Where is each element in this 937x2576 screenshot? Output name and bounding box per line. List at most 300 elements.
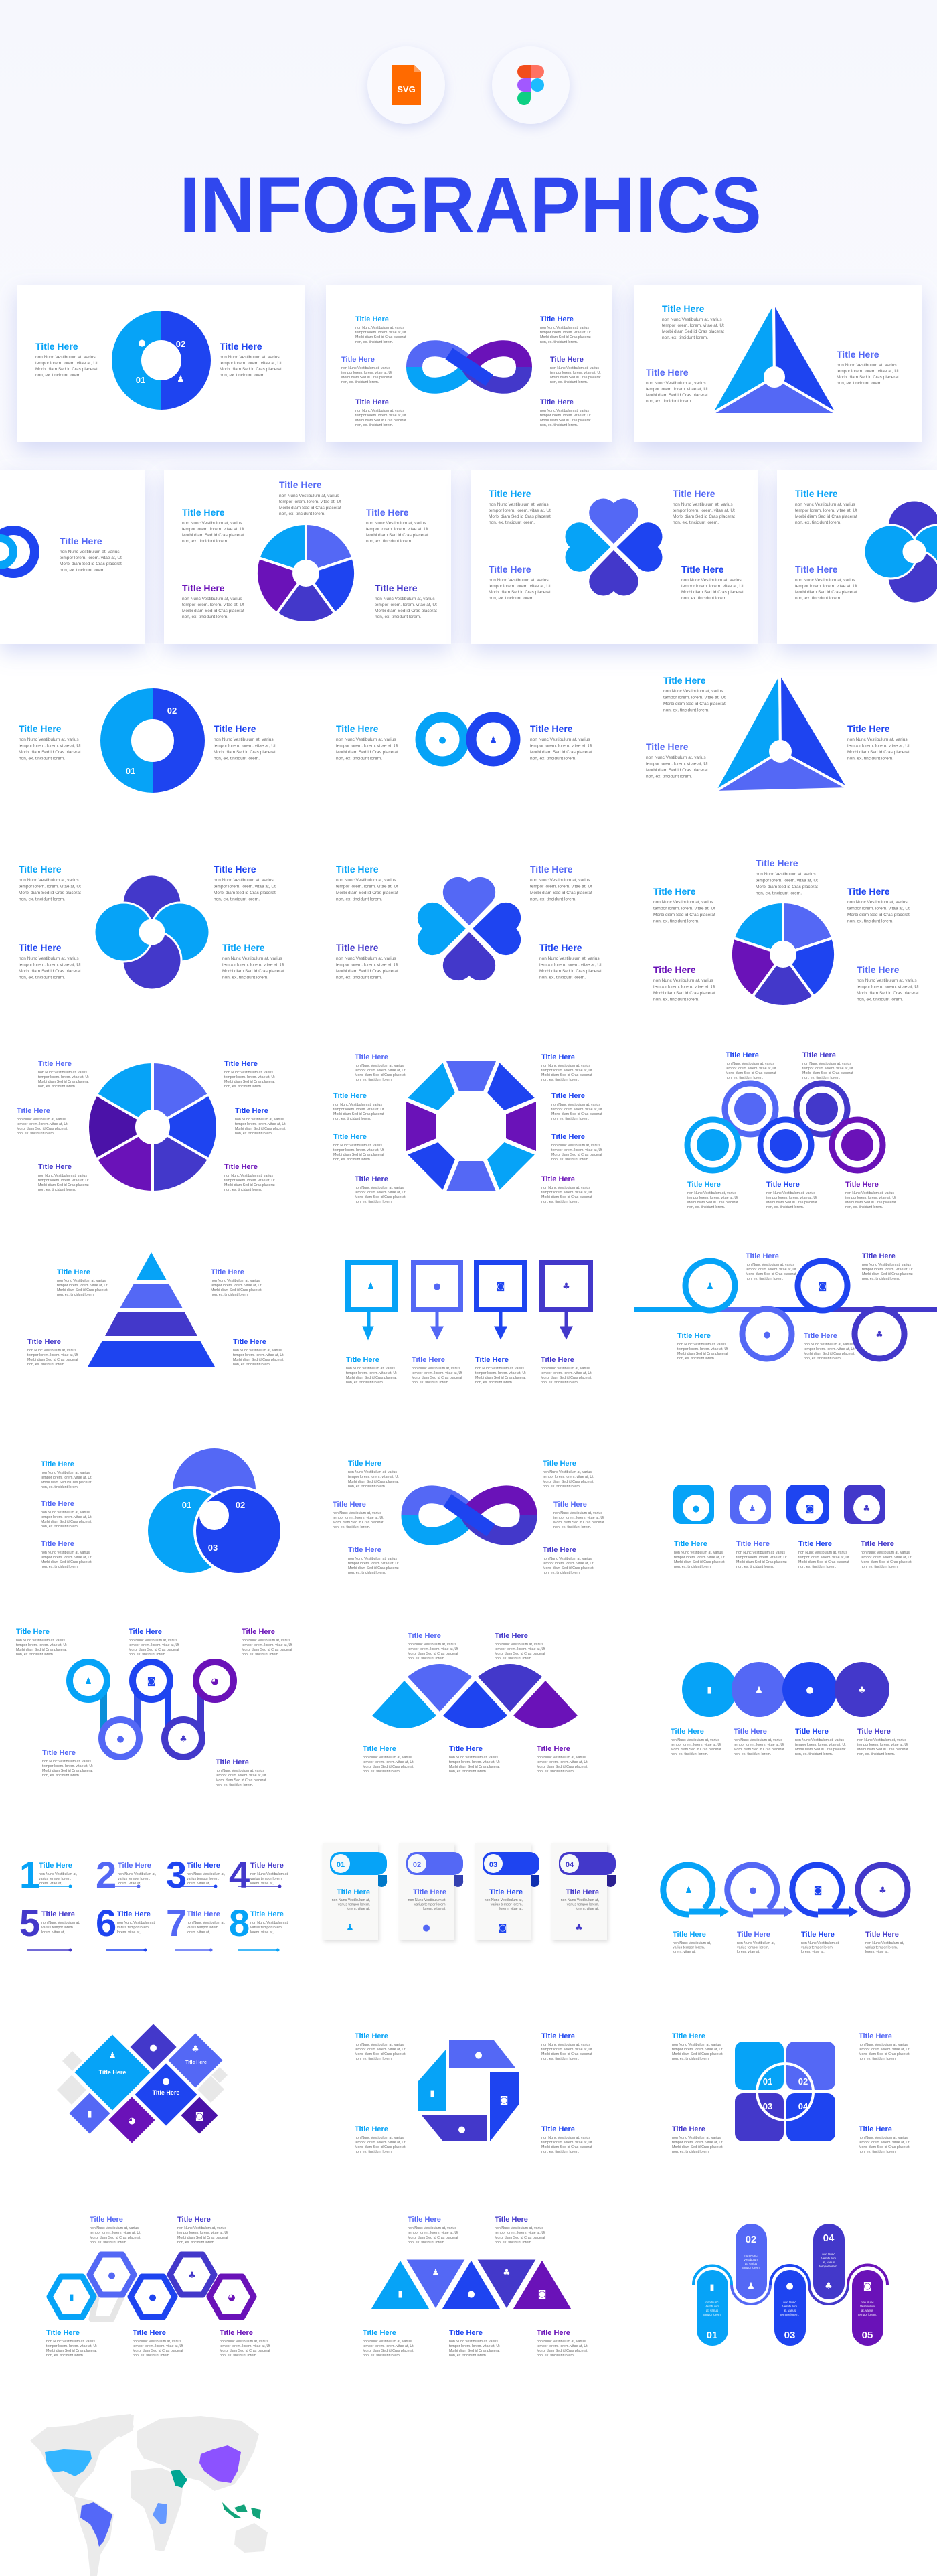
panel: swirl row4: Morbi diam Sed id Cras placerat bbox=[222, 969, 284, 974]
panel: six swirl row5: Title Here bbox=[38, 1060, 72, 1068]
panel: pills 01-05: tempor lorem. bbox=[819, 2265, 838, 2268]
panel: card pentagon: tempor lorem. lorem. vitae at, Ut bbox=[182, 527, 244, 532]
panel: numbered list 1-8: Title Here bbox=[117, 1910, 151, 1918]
panel: four-piece octagon: tempor lorem. lorem. vitae at, Ut bbox=[355, 2048, 406, 2052]
panel: boxes with arrows: tempor lorem. lorem. vitae at, Ut bbox=[475, 1371, 526, 1375]
panel: fans: Morbi diam Sed id Cras placerat bbox=[363, 1765, 414, 1769]
panel: snake rings: Title Here bbox=[242, 1628, 275, 1636]
panel: venn: Title Here bbox=[41, 1460, 74, 1468]
panel: four-piece octagon: non Nunc Vestibulum at, varius bbox=[541, 2136, 590, 2140]
text: right: tempor lorem. lorem. vitae at, Ut bbox=[220, 361, 282, 366]
panel: six swirl row5: Title Here bbox=[224, 1163, 258, 1171]
panel: card pentagon: tempor lorem. lorem. vitae at, Ut bbox=[366, 527, 428, 532]
chart: donut two halves: ♟ bbox=[177, 374, 185, 384]
panel: triangle row3: non, ex. tincidunt lorem. bbox=[663, 708, 709, 712]
panel: numbered list 1-8: lorem. vitae at, bbox=[250, 1882, 274, 1886]
panel: donut row3 bbox=[19, 704, 276, 777]
panel: two rings: non Nunc Vestibulum at, varius bbox=[530, 737, 590, 742]
panel: octagon row5: non Nunc Vestibulum at, varius bbox=[355, 1186, 404, 1190]
panel: triangles: Title Here bbox=[449, 2329, 483, 2337]
panel: triangle row3: Morbi diam Sed id Cras placerat bbox=[847, 750, 910, 755]
panel: pyramid: tempor lorem. lorem. vitae at, Ut bbox=[57, 1284, 108, 1288]
text blocks infinity: Title Here bbox=[355, 398, 389, 406]
panel: diamonds: ◙ bbox=[195, 2111, 203, 2121]
panel: tabs row7: Morbi diam Sed id Cras placerat bbox=[798, 1560, 849, 1564]
panel: infinity row7 bbox=[333, 1460, 604, 1575]
panel: venn: non, ex. tincidunt lorem. bbox=[41, 1525, 78, 1529]
text blocks triangle: non Nunc Vestibulum at, varius bbox=[837, 363, 897, 368]
panel: swirl row4: tempor lorem. lorem. vitae at, Ut bbox=[214, 884, 276, 889]
panel: six swirl row5: non Nunc Vestibulum at, varius bbox=[224, 1071, 273, 1075]
panel: pills 01-05: 04 bbox=[823, 2232, 835, 2244]
panel: card swirl partial: non, ex. tincidunt lorem. bbox=[795, 520, 841, 525]
panel: hexagons: ● bbox=[149, 2293, 157, 2303]
panel: hexagons: Morbi diam Sed id Cras placerat bbox=[220, 2349, 270, 2353]
panel: hexagons: non, ex. tincidunt lorem. bbox=[177, 2241, 215, 2245]
panel: pentagon row4: non, ex. tincidunt lorem. bbox=[653, 998, 699, 1002]
panel: card clover: Morbi diam Sed id Cras placerat bbox=[489, 590, 551, 595]
panel: triangle row3: tempor lorem. lorem. vitae at, Ut bbox=[663, 695, 726, 700]
chart: donut two halves: 01 bbox=[136, 375, 145, 385]
text: right: non Nunc Vestibulum at, varius bbox=[220, 355, 280, 360]
panel: pills 01-05: 02 bbox=[746, 2234, 756, 2245]
panel: timeline rings: Title Here bbox=[862, 1252, 896, 1260]
panel: snake rings: ◕ bbox=[211, 1677, 219, 1687]
panel: card swirl partial: tempor lorem. lorem. vitae at, Ut bbox=[795, 508, 857, 513]
panel: venn: Morbi diam Sed id Cras placerat bbox=[41, 1520, 92, 1524]
panel: octagon row5: tempor lorem. lorem. vitae at, Ut bbox=[551, 1148, 602, 1152]
panel: hexagons: Morbi diam Sed id Cras placerat bbox=[46, 2349, 97, 2353]
panel: card swirl partial: Morbi diam Sed id Cras placerat bbox=[795, 590, 857, 595]
panel: swirl row4: tempor lorem. lorem. vitae at, Ut bbox=[19, 884, 81, 889]
panel: quad squares: non Nunc Vestibulum at, varius bbox=[859, 2136, 908, 2140]
panel: fans: non Nunc Vestibulum at, varius bbox=[537, 1756, 586, 1760]
panel: octagon row5: Morbi diam Sed id Cras placerat bbox=[551, 1112, 602, 1116]
panel: card clover bbox=[471, 470, 758, 644]
panel: two rings bbox=[336, 717, 592, 761]
panel: card swirl partial: non Nunc Vestibulum at, varius bbox=[795, 578, 855, 583]
panel: quad squares: Title Here bbox=[859, 2032, 892, 2040]
panel: card swirl partial: Title Here bbox=[795, 488, 838, 499]
panel: pills 01-05: tempor lorem. bbox=[858, 2313, 877, 2316]
panel: swirl row4: non, ex. tincidunt lorem. bbox=[19, 897, 65, 901]
panel: timeline rings: tempor lorem. lorem. vitae at, Ut bbox=[862, 1268, 913, 1272]
panel: fans: Morbi diam Sed id Cras placerat bbox=[495, 1652, 545, 1656]
panel: ribbon cards 01-04: varius tempor lorem. bbox=[491, 1903, 523, 1907]
panel: numbered list 1-8: lorem. vitae at, bbox=[41, 1930, 65, 1935]
panel: overlapping circles: Title Here bbox=[734, 1728, 767, 1736]
panel: quad squares: tempor lorem. lorem. vitae at, Ut bbox=[859, 2141, 910, 2145]
panel: infinity row7: non, ex. tincidunt lorem. bbox=[348, 1571, 386, 1575]
panel: card clover: non Nunc Vestibulum at, varius bbox=[681, 578, 742, 583]
panel: boxes with arrows: non, ex. tincidunt lorem. bbox=[541, 1381, 578, 1385]
panel: infinity row7: tempor lorem. lorem. vitae at, Ut bbox=[543, 1475, 594, 1479]
panel: clover row4: tempor lorem. lorem. vitae at, Ut bbox=[539, 963, 602, 967]
panel: timeline rings: non Nunc Vestibulum at, varius bbox=[677, 1343, 726, 1347]
chart: triangle bbox=[711, 302, 838, 414]
chart: donut two halves: 02 bbox=[176, 339, 185, 349]
panel: triangle row3: tempor lorem. lorem. vitae at, Ut bbox=[646, 762, 708, 766]
panel: circle arrows: Title Here bbox=[673, 1930, 706, 1939]
panel: hexagons: tempor lorem. lorem. vitae at, Ut bbox=[46, 2344, 97, 2348]
text blocks infinity: non Nunc Vestibulum at, varius bbox=[540, 409, 589, 413]
panel: diamonds: ▮ bbox=[87, 2109, 92, 2119]
panel: card clover: non, ex. tincidunt lorem. bbox=[673, 520, 719, 525]
panel: pentagon row4: tempor lorem. lorem. vitae at, Ut bbox=[756, 879, 818, 883]
panel: ribbon cards 01-04: non Nunc Vestibulum at, bbox=[408, 1898, 446, 1902]
panel: octagon row5 bbox=[333, 1053, 602, 1204]
text blocks triangle: non, ex. tincidunt lorem. bbox=[662, 335, 708, 340]
panel: swirl row4: tempor lorem. lorem. vitae at, Ut bbox=[222, 963, 284, 967]
panel: overlapping circles: Morbi diam Sed id Cras placerat bbox=[795, 1748, 846, 1752]
panel: numbered list 1-8: non Nunc Vestibulum at, bbox=[118, 1872, 156, 1876]
panel: card clover: Title Here bbox=[489, 488, 531, 499]
panel: pentagon row4: non, ex. tincidunt lorem. bbox=[857, 998, 903, 1002]
panel: fans: Title Here bbox=[449, 1745, 483, 1753]
panel: infinity row7: non, ex. tincidunt lorem. bbox=[333, 1525, 370, 1529]
panel: triangles: tempor lorem. lorem. vitae at, Ut bbox=[363, 2344, 414, 2348]
panel: octagon row5: non Nunc Vestibulum at, varius bbox=[551, 1144, 600, 1148]
panel: four-piece octagon: non Nunc Vestibulum at, varius bbox=[355, 2136, 404, 2140]
panel: pyramid: Title Here bbox=[57, 1268, 90, 1276]
panel: boxes with arrows bbox=[345, 1260, 593, 1385]
text blocks infinity: Morbi diam Sed id Cras placerat bbox=[355, 335, 406, 339]
panel: triangles: ◙ bbox=[538, 2289, 546, 2299]
chart: clover hearts bbox=[565, 498, 663, 596]
panel: pentagon row4: Morbi diam Sed id Cras placerat bbox=[857, 991, 919, 996]
panel: card pentagon: non, ex. tincidunt lorem. bbox=[375, 615, 421, 619]
text blocks infinity: Title Here bbox=[540, 315, 574, 323]
panel: four-piece octagon: Morbi diam Sed id Cras placerat bbox=[355, 2052, 406, 2056]
panel: timeline rings: non, ex. tincidunt lorem. bbox=[677, 1357, 715, 1361]
panel: clover row4: non, ex. tincidunt lorem. bbox=[539, 975, 586, 980]
panel: five rings row5: Morbi diam Sed id Cras placerat bbox=[687, 1201, 738, 1205]
panel: hexagons: Title Here bbox=[220, 2329, 253, 2337]
panel: four-piece octagon: non, ex. tincidunt lorem. bbox=[541, 2057, 579, 2061]
panel: pentagon row4: non, ex. tincidunt lorem. bbox=[847, 919, 893, 924]
panel: tabs row7: non, ex. tincidunt lorem. bbox=[798, 1565, 836, 1569]
panel: snake rings: tempor lorem. lorem. vitae at, Ut bbox=[216, 1774, 266, 1778]
panel: four-piece octagon: ● bbox=[458, 2125, 466, 2135]
panel: card swirl partial: non Nunc Vestibulum at, varius bbox=[795, 502, 855, 507]
panel: snake rings: non Nunc Vestibulum at, varius bbox=[42, 1760, 91, 1764]
panel: octagon row5: Morbi diam Sed id Cras placerat bbox=[541, 1195, 592, 1199]
panel: pyramid: Morbi diam Sed id Cras placerat bbox=[57, 1288, 108, 1292]
panel: four-piece octagon: tempor lorem. lorem. vitae at, Ut bbox=[355, 2141, 406, 2145]
panel: five rings row5: Title Here bbox=[766, 1181, 800, 1189]
panel: card pentagon: Morbi diam Sed id Cras placerat bbox=[182, 533, 244, 538]
panel: tabs row7: tempor lorem. lorem. vitae at, Ut bbox=[736, 1556, 787, 1560]
panel: pills 01-05: non Nunc bbox=[861, 2301, 874, 2304]
panel: snake rings: Title Here bbox=[216, 1758, 249, 1766]
panel: ribbon cards 01-04: 03 bbox=[489, 1861, 497, 1869]
text blocks triangle: non, ex. tincidunt lorem. bbox=[837, 381, 883, 386]
panel: snake rings: ◙ bbox=[147, 1677, 155, 1687]
panel: quad squares: Title Here bbox=[672, 2125, 705, 2133]
panel: fans: tempor lorem. lorem. vitae at, Ut bbox=[537, 1760, 588, 1764]
panel: hexagons: tempor lorem. lorem. vitae at, Ut bbox=[177, 2231, 228, 2235]
panel: timeline rings: ● bbox=[763, 1330, 771, 1340]
panel: overlapping circles: Morbi diam Sed id Cras placerat bbox=[671, 1748, 721, 1752]
panel: ribbon cards 01-04: ♟ bbox=[346, 1923, 354, 1933]
panel: tabs row7: Title Here bbox=[798, 1540, 832, 1548]
panel: boxes with arrows: Morbi diam Sed id Cras placerat bbox=[346, 1376, 397, 1380]
panel: boxes with arrows: Morbi diam Sed id Cras placerat bbox=[541, 1376, 592, 1380]
panel: hexagons: non, ex. tincidunt lorem. bbox=[46, 2354, 84, 2358]
text blocks infinity bbox=[341, 315, 601, 427]
panel: snake rings: Morbi diam Sed id Cras placerat bbox=[42, 1769, 93, 1773]
panel: pills 01-05: at, varius bbox=[823, 2261, 835, 2264]
panel: pills 01-05: tempor lorem. bbox=[742, 2266, 760, 2269]
panel: snake rings: tempor lorem. lorem. vitae at, Ut bbox=[42, 1764, 93, 1768]
panel: card clover: tempor lorem. lorem. vitae at, Ut bbox=[681, 584, 744, 589]
panel: pills 01-05: ◙ bbox=[863, 2281, 871, 2291]
panel: timeline rings: Morbi diam Sed id Cras placerat bbox=[862, 1272, 913, 1276]
panel: fans: non, ex. tincidunt lorem. bbox=[537, 1770, 574, 1774]
panel: octagon row5: Title Here bbox=[355, 1053, 388, 1061]
panel: quad squares: 01 bbox=[763, 2076, 772, 2087]
panel: overlapping circles: non Nunc Vestibulum at, varius bbox=[671, 1738, 719, 1742]
panel: five rings row5: Morbi diam Sed id Cras placerat bbox=[802, 1071, 853, 1075]
panel: hexagons: non Nunc Vestibulum at, varius bbox=[46, 2340, 95, 2344]
panel: five rings row5: Title Here bbox=[687, 1181, 721, 1189]
panel: circle arrows: lorem. vitae at, bbox=[865, 1950, 889, 1954]
panel: six swirl row5: tempor lorem. lorem. vitae at, Ut bbox=[224, 1179, 275, 1183]
panel: pyramid: non, ex. tincidunt lorem. bbox=[211, 1293, 248, 1297]
panel: swirl row4: non, ex. tincidunt lorem. bbox=[19, 975, 65, 980]
chart: donut two halves bbox=[126, 325, 196, 395]
panel: infinity row7: Title Here bbox=[348, 1546, 381, 1554]
panel: triangles: Morbi diam Sed id Cras placerat bbox=[537, 2349, 588, 2353]
text blocks triangle: non Nunc Vestibulum at, varius bbox=[646, 381, 706, 386]
panel: overlapping circles: Title Here bbox=[795, 1728, 829, 1736]
panel: hexagons: non Nunc Vestibulum at, varius bbox=[220, 2340, 268, 2344]
panel: infinity row7: tempor lorem. lorem. vitae at, Ut bbox=[348, 1475, 399, 1479]
panel: pills 01-05: ♟ bbox=[747, 2281, 755, 2291]
panel: numbered list 1-8: Title Here bbox=[41, 1910, 75, 1918]
panel: timeline rings: non Nunc Vestibulum at, varius bbox=[746, 1263, 794, 1267]
text blocks infinity: non Nunc Vestibulum at, varius bbox=[550, 366, 599, 370]
panel: five rings row5: non Nunc Vestibulum at, varius bbox=[726, 1062, 774, 1066]
panel: tabs row7: non, ex. tincidunt lorem. bbox=[674, 1565, 711, 1569]
text: right bbox=[220, 341, 282, 378]
panel: boxes with arrows: Title Here bbox=[412, 1356, 445, 1364]
panel: five rings row5: non Nunc Vestibulum at, varius bbox=[802, 1062, 851, 1066]
panel: venn: 02 bbox=[236, 1500, 245, 1510]
panel: five rings row5: Title Here bbox=[845, 1181, 879, 1189]
panel: card pentagon: Morbi diam Sed id Cras placerat bbox=[366, 533, 428, 538]
panel: triangle row3: non, ex. tincidunt lorem. bbox=[847, 757, 893, 761]
panel: five rings row5: non, ex. tincidunt lorem. bbox=[726, 1076, 763, 1080]
panel: boxes with arrows: non, ex. tincidunt lorem. bbox=[346, 1381, 384, 1385]
panel: four-piece octagon: ▮ bbox=[430, 2089, 435, 2099]
panel: two rings: tempor lorem. lorem. vitae at, Ut bbox=[530, 743, 592, 749]
panel: snake rings: non, ex. tincidunt lorem. bbox=[216, 1783, 253, 1787]
panel: quad squares: Morbi diam Sed id Cras placerat bbox=[859, 2052, 910, 2056]
panel: pills 01-05: at, varius bbox=[745, 2262, 758, 2265]
panel: pyramid: non, ex. tincidunt lorem. bbox=[233, 1363, 270, 1367]
panel: infinity row7: tempor lorem. lorem. vitae at, Ut bbox=[348, 1562, 399, 1566]
panel: octagon row5: non, ex. tincidunt lorem. bbox=[541, 1078, 579, 1082]
panel: pentagon row4: Morbi diam Sed id Cras placerat bbox=[847, 913, 910, 917]
panel: quad squares: 02 bbox=[798, 2076, 808, 2087]
panel: circle arrows: lorem. vitae at, bbox=[673, 1950, 696, 1954]
panel: octagon row5: non, ex. tincidunt lorem. bbox=[333, 1117, 371, 1121]
panel: card pentagon: Title Here bbox=[279, 479, 322, 490]
panel: triangles: Morbi diam Sed id Cras placerat bbox=[449, 2349, 500, 2353]
panel: pentagon row4: Title Here bbox=[653, 886, 696, 897]
panel: ribbon cards 01-04: varius tempor lorem. bbox=[567, 1903, 599, 1907]
panel: numbered list 1-8: lorem. vitae at, bbox=[118, 1882, 141, 1886]
panel: card pentagon: non, ex. tincidunt lorem. bbox=[182, 539, 228, 544]
panel: two rings: non, ex. tincidunt lorem. bbox=[336, 757, 382, 761]
panel: clover row4: non Nunc Vestibulum at, varius bbox=[539, 956, 600, 961]
panel: triangles: ▮ bbox=[398, 2289, 403, 2299]
panel: card swirl partial bbox=[777, 470, 937, 644]
panel: overlapping circles: non, ex. tincidunt lorem. bbox=[734, 1752, 771, 1756]
panel: swirl row4: Title Here bbox=[214, 864, 256, 875]
panel: venn: non Nunc Vestibulum at, varius bbox=[41, 1471, 90, 1475]
panel: hexagons: Title Here bbox=[133, 2329, 166, 2337]
panel: two rings: Morbi diam Sed id Cras placerat bbox=[336, 750, 398, 755]
panel: snake rings: non Nunc Vestibulum at, varius bbox=[242, 1639, 290, 1643]
panel: triangles: ● bbox=[467, 2289, 475, 2299]
panel: clover row4: Morbi diam Sed id Cras placerat bbox=[336, 969, 398, 974]
panel: fans: non, ex. tincidunt lorem. bbox=[408, 1657, 445, 1661]
panel: pentagon row4: tempor lorem. lorem. vitae at, Ut bbox=[857, 984, 919, 990]
panel: timeline rings: tempor lorem. lorem. vitae at, Ut bbox=[746, 1268, 796, 1272]
panel: overlapping circles: tempor lorem. lorem. vitae at, Ut bbox=[857, 1743, 908, 1747]
panel: boxes with arrows: non Nunc Vestibulum at, varius bbox=[346, 1367, 395, 1371]
panel: six swirl row5: non Nunc Vestibulum at, varius bbox=[17, 1118, 66, 1122]
panel: triangles: Morbi diam Sed id Cras placerat bbox=[495, 2236, 545, 2240]
panel: hexagons: ♣ bbox=[188, 2271, 196, 2281]
panel: triangle row3: tempor lorem. lorem. vitae at, Ut bbox=[847, 743, 910, 749]
panel: four-piece octagon: Title Here bbox=[355, 2032, 388, 2040]
panel: fans: Title Here bbox=[537, 1745, 570, 1753]
panel: octagon row5: tempor lorem. lorem. vitae at, Ut bbox=[551, 1108, 602, 1112]
panel: four-piece octagon: ● bbox=[475, 2050, 483, 2060]
panel: six swirl row5: Morbi diam Sed id Cras placerat bbox=[235, 1127, 286, 1131]
panel: six swirl row5: tempor lorem. lorem. vitae at, Ut bbox=[38, 1179, 89, 1183]
text blocks infinity: non, ex. tincidunt lorem. bbox=[540, 340, 578, 344]
panel: six swirl row5: non, ex. tincidunt lorem. bbox=[38, 1188, 76, 1192]
text blocks infinity: Morbi diam Sed id Cras placerat bbox=[341, 376, 392, 380]
panel: pentagon row4: non Nunc Vestibulum at, varius bbox=[653, 900, 713, 905]
panel: pentagon row4: Title Here bbox=[847, 886, 890, 897]
panel: five rings row5: Morbi diam Sed id Cras placerat bbox=[845, 1201, 896, 1205]
panel: donut row3: Title Here bbox=[214, 723, 256, 734]
panel: numbered list 1-8: lorem. vitae at, bbox=[117, 1930, 141, 1935]
text: left: Morbi diam Sed id Cras placerat bbox=[35, 367, 98, 372]
panel: pentagon row4: non Nunc Vestibulum at, varius bbox=[857, 978, 917, 983]
panel: hexagons: tempor lorem. lorem. vitae at, Ut bbox=[133, 2344, 183, 2348]
text blocks infinity: Title Here bbox=[341, 356, 375, 364]
panel: octagon row5: Morbi diam Sed id Cras placerat bbox=[333, 1153, 384, 1157]
panel: octagon row5: non Nunc Vestibulum at, varius bbox=[333, 1144, 382, 1148]
panel: venn: 03 bbox=[208, 1543, 218, 1553]
panel: quad squares: non Nunc Vestibulum at, varius bbox=[672, 2043, 721, 2047]
panel: pentagon row4: Title Here bbox=[653, 964, 696, 975]
panel: fans: non Nunc Vestibulum at, varius bbox=[363, 1756, 412, 1760]
panel: numbered list 1-8: 5 bbox=[19, 1902, 40, 1944]
panel: pills 01-05: Vestibulum bbox=[821, 2257, 836, 2260]
panel: circle arrows: ◙ bbox=[814, 1886, 822, 1896]
panel: tabs row7: Title Here bbox=[736, 1540, 770, 1548]
panel: card pentagon: non Nunc Vestibulum at, varius bbox=[366, 521, 426, 526]
panel: octagon row5: non Nunc Vestibulum at, varius bbox=[541, 1064, 590, 1068]
text: left: tempor lorem. lorem. vitae at, Ut bbox=[35, 361, 98, 366]
panel: octagon row5: Title Here bbox=[333, 1133, 367, 1141]
panel: card ring partial bbox=[0, 470, 145, 644]
panel: clover row4: tempor lorem. lorem. vitae at, Ut bbox=[530, 884, 592, 889]
text blocks infinity: non, ex. tincidunt lorem. bbox=[355, 423, 393, 427]
panel: tabs row7: tempor lorem. lorem. vitae at, Ut bbox=[861, 1556, 912, 1560]
panel: five rings row5: non Nunc Vestibulum at, varius bbox=[687, 1191, 736, 1195]
panel: pills 01-05: ♣ bbox=[825, 2281, 833, 2291]
panel: snake rings: non, ex. tincidunt lorem. bbox=[242, 1653, 279, 1657]
panel: venn: Title Here bbox=[41, 1540, 74, 1548]
panel: timeline rings: ◙ bbox=[819, 1282, 827, 1292]
panel: diamonds: Title Here bbox=[153, 2089, 179, 2096]
panel: boxes with arrows: Title Here bbox=[346, 1356, 379, 1364]
text: right: non, ex. tincidunt lorem. bbox=[220, 373, 266, 378]
panel: numbered list 1-8: Title Here bbox=[118, 1862, 151, 1870]
text: left: Title Here bbox=[35, 341, 78, 352]
panel: ribbon cards 01-04: non Nunc Vestibulum at, bbox=[485, 1898, 523, 1902]
panel: quad squares: non Nunc Vestibulum at, varius bbox=[672, 2136, 721, 2140]
panel: boxes with arrows: Morbi diam Sed id Cras placerat bbox=[412, 1376, 462, 1380]
text blocks triangle: non, ex. tincidunt lorem. bbox=[646, 399, 692, 404]
panel: card clover: Morbi diam Sed id Cras placerat bbox=[489, 514, 551, 519]
panel: numbered list 1-8: Title Here bbox=[39, 1862, 72, 1870]
panel: circle arrows: varius tempor lorem. bbox=[801, 1946, 833, 1950]
panel: clover row4: non Nunc Vestibulum at, varius bbox=[336, 878, 396, 883]
panel: hexagons: tempor lorem. lorem. vitae at, Ut bbox=[220, 2344, 270, 2348]
panel: six swirl row5: non, ex. tincidunt lorem. bbox=[224, 1188, 262, 1192]
panel: four-piece octagon: Morbi diam Sed id Cras placerat bbox=[541, 2052, 592, 2056]
panel: clover row4: Morbi diam Sed id Cras placerat bbox=[539, 969, 602, 974]
panel: infinity row7: Title Here bbox=[333, 1501, 366, 1509]
panel: overlapping circles: tempor lorem. lorem. vitae at, Ut bbox=[734, 1743, 784, 1747]
panel: donut row3: non Nunc Vestibulum at, varius bbox=[19, 737, 79, 742]
panel: pyramid: non Nunc Vestibulum at, varius bbox=[57, 1279, 106, 1283]
panel: pyramid: tempor lorem. lorem. vitae at, Ut bbox=[27, 1353, 78, 1357]
panel: hexagons: ◕ bbox=[228, 2293, 236, 2303]
panel: infinity row7: Morbi diam Sed id Cras placerat bbox=[333, 1521, 384, 1525]
panel: pills 01-05: Vestibulum bbox=[705, 2305, 719, 2308]
panel: overlapping circles: non, ex. tincidunt lorem. bbox=[671, 1752, 708, 1756]
panel: hexagons: tempor lorem. lorem. vitae at, Ut bbox=[90, 2231, 141, 2235]
panel: numbered list 1-8: varius tempor lorem. bbox=[187, 1877, 219, 1881]
panel: numbered list 1-8: non Nunc Vestibulum at, bbox=[250, 1921, 288, 1925]
panel: six swirl row5: Title Here bbox=[235, 1107, 268, 1115]
panel: clover row4: Title Here bbox=[336, 864, 379, 875]
panel: four-piece octagon: ◙ bbox=[500, 2095, 508, 2105]
panel: triangles: tempor lorem. lorem. vitae at, Ut bbox=[495, 2231, 545, 2235]
panel: quad squares: Morbi diam Sed id Cras placerat bbox=[672, 2145, 723, 2149]
panel: overlapping circles: tempor lorem. lorem. vitae at, Ut bbox=[671, 1743, 721, 1747]
panel: world map bbox=[30, 2414, 268, 2576]
text blocks infinity: non, ex. tincidunt lorem. bbox=[540, 423, 578, 427]
panel: snake rings: tempor lorem. lorem. vitae at, Ut bbox=[129, 1643, 179, 1647]
panel: pyramid: Title Here bbox=[27, 1338, 61, 1346]
chart: donut two halves: ● bbox=[138, 338, 146, 348]
panel: six swirl row5: non Nunc Vestibulum at, varius bbox=[224, 1174, 273, 1178]
panel: card ring partial: tempor lorem. lorem. vitae at, Ut bbox=[60, 556, 122, 560]
panel: ribbon cards 01-04: Title Here bbox=[413, 1888, 446, 1896]
text blocks infinity: Morbi diam Sed id Cras placerat bbox=[540, 419, 591, 423]
